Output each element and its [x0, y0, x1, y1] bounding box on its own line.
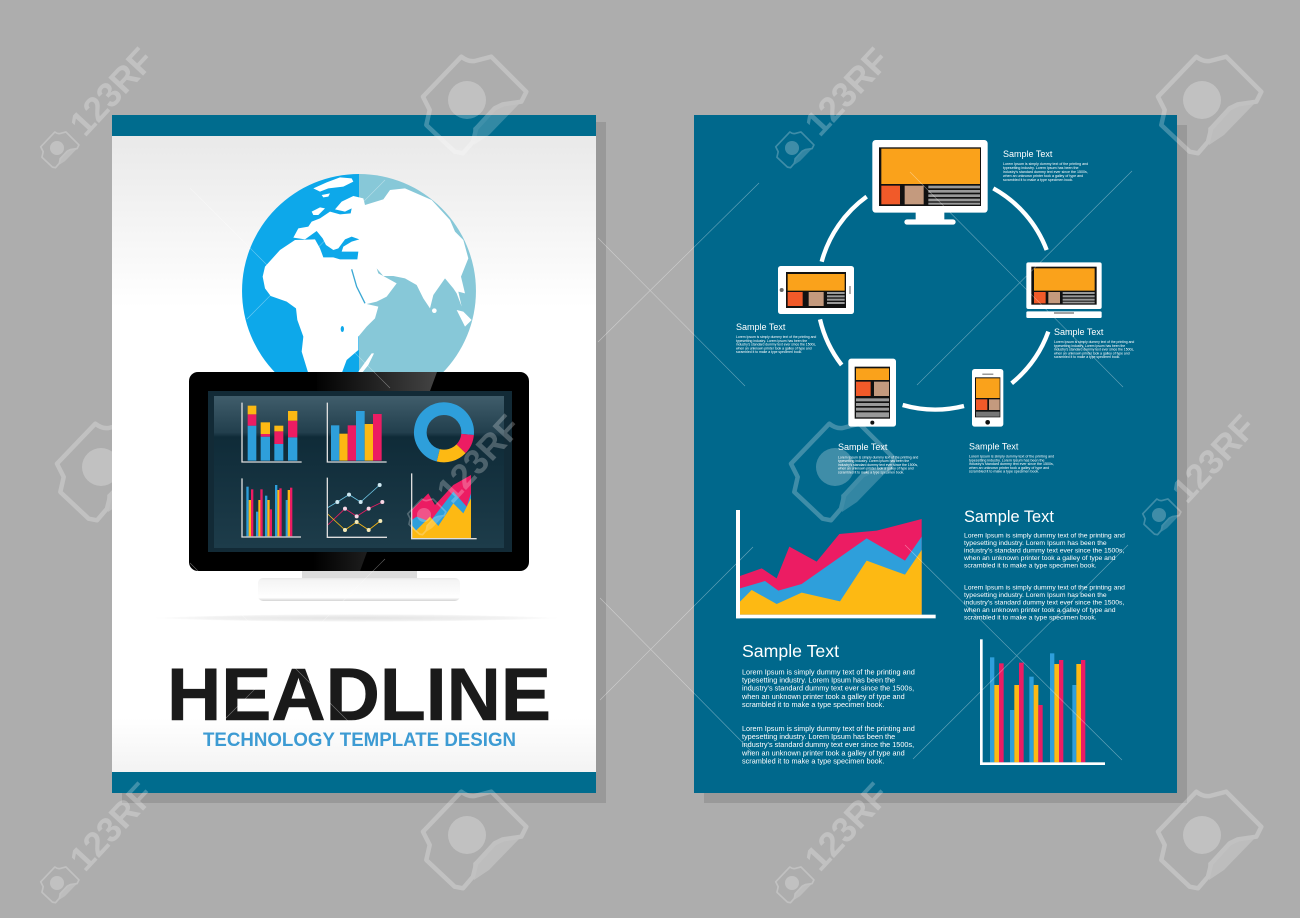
bezel gloss: [313, 372, 437, 571]
monitor bezel: [189, 372, 529, 571]
text block: phone: scrambled it to make a type specimen book.: [969, 470, 1039, 474]
text block: laptop: [1054, 327, 1134, 359]
watermark logo: bottom left: 123RF: [62, 776, 162, 878]
icon: phone: [972, 369, 1003, 427]
text block: portrait tablet: [838, 442, 918, 474]
right page background: [694, 115, 1177, 793]
text block: desktop: scrambled it to make a type specimen book.: [1003, 178, 1073, 182]
text block: landscape tablet: industry's standard dummy text ever since the 1500s,: [736, 342, 816, 346]
cover background: [112, 136, 596, 772]
watermark logo: middle far right: 123RF: [1164, 408, 1264, 510]
watermark logo: middle far right: [1143, 408, 1264, 535]
text block: phone: Sample Text: [969, 442, 1019, 452]
text block: lower paragraphs: industry's standard dummy text ever since the 1500s,: [742, 684, 914, 693]
text block: lower paragraphs: scrambled it to make a type specimen book.: [742, 700, 884, 709]
left page shadow: [122, 122, 606, 803]
panel: right flyer: [694, 115, 1177, 793]
text block: upper paragraphs: typesetting industry. Lorem Ipsum has been the: [964, 592, 1107, 599]
monitor with charts: [189, 372, 529, 571]
dashboard charts: [242, 403, 477, 539]
chart: line chart: [327, 478, 387, 537]
headline: HEADLINE: [167, 653, 551, 736]
icon: globe: [242, 174, 476, 372]
text block: phone: Lorem Ipsum is simply dummy text of the printing and: [969, 455, 1054, 459]
text block: lower paragraphs: Sample Text: [742, 641, 839, 661]
text block: upper paragraphs: Lorem Ipsum is simply dummy text of the printing and: [964, 532, 1125, 540]
text block: phone: when an unknown printer took a galley of type and: [969, 466, 1049, 470]
text block: upper paragraphs: typesetting industry. Lorem Ipsum has been the: [964, 540, 1107, 547]
watermark logo: top right: [776, 41, 897, 168]
text block: upper paragraphs: when an unknown printer took a galley of type and: [963, 555, 1116, 562]
text block: lower paragraphs: Lorem Ipsum is simply dummy text of the printing and: [742, 668, 915, 676]
text block: upper paragraphs: industry's standard dummy text ever since the 1500s,: [964, 548, 1124, 555]
text block: upper paragraphs: scrambled it to make a type specimen book.: [964, 563, 1097, 570]
diagram: devices cycle: [778, 140, 1102, 427]
charts: lower section: [736, 510, 1105, 765]
text block: upper paragraphs: scrambled it to make a type specimen book.: [964, 615, 1097, 622]
text block: laptop: when an unknown printer took a galley of type and: [1054, 351, 1130, 355]
watermark stamp: bottom center: [423, 792, 526, 888]
top band: [112, 115, 596, 136]
text block: landscape tablet: typesetting industry. Lorem Ipsum has been the: [736, 339, 807, 343]
watermark logo: middle center: 123RF: [429, 408, 529, 510]
text block: portrait tablet: scrambled it to make a type specimen book.: [838, 470, 904, 474]
text block: lower paragraphs: industry's standard dummy text ever since the 1500s,: [742, 740, 914, 749]
text block: lower paragraphs: [741, 641, 915, 765]
text block: portrait tablet: typesetting industry. Lorem Ipsum has been the: [838, 459, 909, 463]
chart: thin bars: [242, 478, 301, 537]
text block: lower paragraphs: typesetting industry. Lorem Ipsum has been the: [742, 732, 895, 741]
chart: area chart: [412, 473, 477, 539]
chart: stacked bars: [242, 403, 302, 462]
text block: phone: typesetting industry. Lorem Ipsum has been the: [969, 458, 1044, 462]
cycle arcs: [820, 188, 1048, 410]
text block: laptop: industry's standard dummy text ever since the 1500s,: [1054, 348, 1134, 352]
icon: landscape tablet: [778, 266, 854, 314]
text block: upper paragraphs: Sample Text: [964, 508, 1054, 526]
watermark logo: top left: [41, 41, 162, 168]
chart: bar chart: [980, 639, 1105, 765]
watermark stamp: top far right: [1158, 57, 1261, 153]
icon: portrait tablet: [848, 359, 896, 427]
watermark stamp: middle left: [57, 424, 160, 520]
text block: landscape tablet: when an unknown printer took a galley of type and: [736, 346, 812, 350]
chart: area chart: [736, 510, 936, 618]
watermark stamp: top center: [423, 57, 526, 153]
text block: landscape tablet: Sample Text: [736, 322, 786, 332]
text block: laptop: typesetting industry. Lorem Ipsum has been the: [1054, 344, 1125, 348]
text block: landscape tablet: Lorem Ipsum is simply dummy text of the printing and: [736, 335, 816, 339]
text block: lower paragraphs: Lorem Ipsum is simply dummy text of the printing and: [742, 724, 915, 733]
screen: [208, 391, 512, 552]
text block: phone: industry's standard dummy text ever since the 1500s,: [969, 462, 1054, 466]
text block: portrait tablet: Sample Text: [838, 442, 888, 452]
watermark logo: bottom right: [776, 776, 897, 903]
watermark lines: [190, 171, 1132, 760]
text block: phone: [969, 442, 1054, 474]
bottom band: [112, 772, 596, 793]
text block: upper paragraphs: [963, 508, 1125, 622]
text block: desktop: [1003, 149, 1088, 182]
text block: laptop: Sample Text: [1054, 327, 1104, 337]
text block: lower paragraphs: when an unknown printer took a galley of type and: [741, 692, 905, 701]
chart: grouped bars: [327, 403, 387, 462]
panel: left flyer cover: [112, 115, 596, 793]
icon: monitor stand: [258, 570, 460, 601]
right page shadow: [704, 125, 1187, 803]
chart: donut: [420, 409, 468, 456]
text block: upper paragraphs: when an unknown printer took a galley of type and: [963, 607, 1116, 614]
text block: landscape tablet: [736, 322, 816, 354]
watermark logo: bottom left: [41, 776, 162, 903]
text block: upper paragraphs: Lorem Ipsum is simply dummy text of the printing and: [964, 584, 1125, 592]
text block: portrait tablet: industry's standard dummy text ever since the 1500s,: [838, 463, 918, 467]
text block: desktop: industry's standard dummy text ever since the 1500s,: [1003, 170, 1088, 174]
text block: desktop: Sample Text: [1003, 149, 1053, 159]
watermark logo: bottom right: 123RF: [797, 776, 897, 878]
text block: desktop: typesetting industry. Lorem Ipsum has been the: [1003, 166, 1078, 170]
watermark stamp: bottom far right: [1158, 792, 1261, 888]
text block: desktop: when an unknown printer took a galley of type and: [1003, 174, 1083, 178]
text block: lower paragraphs: scrambled it to make a type specimen book.: [742, 756, 884, 765]
text block: desktop: Lorem Ipsum is simply dummy text of the printing and: [1003, 162, 1088, 166]
text block: laptop: Lorem Ipsum is simply dummy text of the printing and: [1054, 340, 1134, 344]
shadow under monitor: [150, 614, 563, 622]
watermark stamp: middle right: [791, 424, 894, 520]
watermark logo: top right: 123RF: [797, 41, 897, 143]
text block: upper paragraphs: industry's standard dummy text ever since the 1500s,: [964, 600, 1124, 607]
watermark logo: top left: 123RF: [62, 41, 162, 143]
text block: laptop: scrambled it to make a type specimen book.: [1054, 355, 1120, 359]
text block: portrait tablet: when an unknown printer took a galley of type and: [838, 466, 914, 470]
text block: portrait tablet: Lorem Ipsum is simply dummy text of the printing and: [838, 455, 918, 459]
text block: lower paragraphs: typesetting industry. Lorem Ipsum has been the: [742, 676, 895, 685]
subtitle: TECHNOLOGY TEMPLATE DESIGN: [203, 730, 516, 751]
text block: landscape tablet: scrambled it to make a type specimen book.: [736, 350, 802, 354]
text block: lower paragraphs: when an unknown printer took a galley of type and: [741, 748, 905, 757]
icon: laptop: [1026, 262, 1102, 318]
icon: desktop: [872, 140, 988, 225]
watermark logo: middle center: [408, 408, 529, 535]
